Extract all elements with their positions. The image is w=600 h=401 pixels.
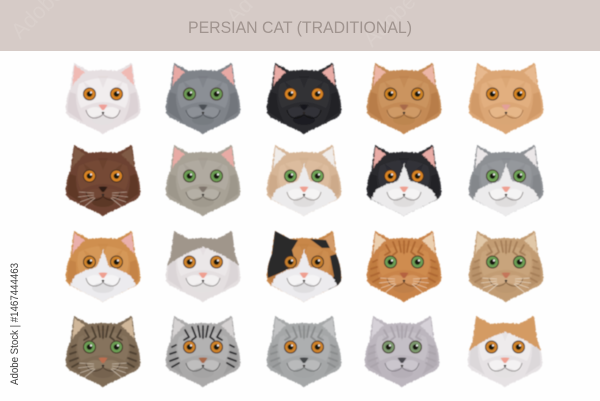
cat: black — [267, 63, 341, 134]
cat: taupe cap and white — [166, 231, 240, 302]
cat: chocolate — [66, 145, 140, 216]
title: PERSIAN CAT (TRADITIONAL) — [188, 18, 412, 37]
cat: cream bicolour — [267, 145, 341, 216]
cat: orange cap and white — [468, 316, 542, 387]
cat: tan tabby — [469, 231, 543, 302]
cat: calico — [267, 231, 341, 302]
cat: gray bicolour — [469, 145, 543, 216]
cat: silver black tabby — [166, 316, 240, 387]
cat: black bicolour — [367, 145, 441, 216]
cat: orange bicolour — [66, 231, 140, 302]
cat: white — [66, 63, 140, 134]
cat: cream — [469, 63, 543, 134]
cat: brown tabby — [66, 316, 140, 387]
header band — [0, 0, 600, 52]
cat: warm gray — [166, 145, 240, 216]
cat: red — [367, 63, 441, 134]
side credit: Adobe Stock | #1467444463 — [9, 263, 21, 385]
cat: lilac tabby — [365, 316, 439, 387]
cat: silver tabby — [267, 316, 341, 387]
cat: red tabby — [367, 231, 441, 302]
cat: blue gray — [166, 63, 240, 134]
